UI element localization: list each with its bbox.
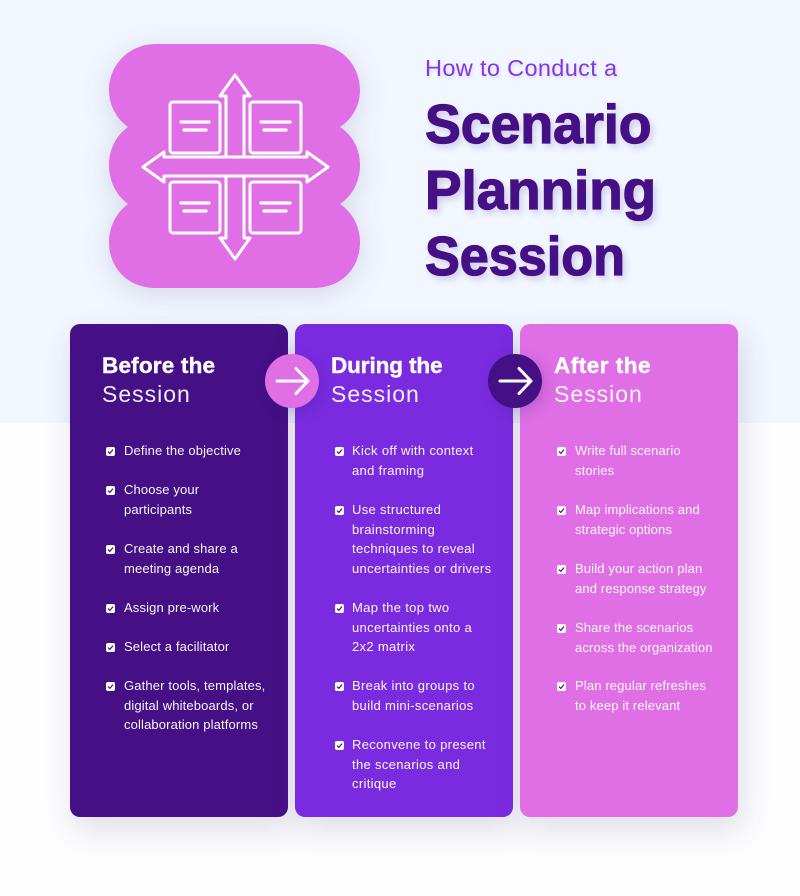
heading: before: Before the [102, 353, 215, 378]
checklist: before [106, 443, 265, 732]
checklist: after: strategic options [575, 522, 672, 536]
checklist: before: digital whiteboards, or [124, 698, 254, 712]
heading: after: Session [554, 381, 643, 407]
checklist: before: participants [124, 502, 192, 516]
checklist: during: the scenarios and [352, 756, 460, 772]
checklist: during: Break into groups to [352, 678, 475, 693]
heading: during: During the [331, 353, 442, 378]
checklist: before: Assign pre-work [124, 600, 219, 615]
checklist: before: Define the objective [124, 443, 241, 458]
checklist: before: meeting agenda [124, 560, 219, 576]
checklist: before: Create and share a [124, 541, 238, 556]
checklist: during: Use structured [352, 502, 441, 517]
title line: Scenario: Scenario [425, 93, 652, 155]
checklist: before: Select a facilitator [124, 639, 229, 654]
checklist: after: Write full scenario [575, 443, 681, 458]
checklist: during: 2x2 matrix [352, 639, 415, 654]
arrow: before to during [265, 354, 319, 408]
checklist: before: collaboration platforms [124, 717, 258, 732]
title line: Planning: Planning [425, 159, 656, 221]
checklist: during: Map the top two [352, 600, 449, 615]
panel: before the session [70, 324, 288, 817]
heading: during: Session [331, 381, 420, 407]
checklist: during: techniques to reveal [352, 541, 475, 556]
heading: during [331, 353, 442, 407]
checklist: during: brainstorming [352, 522, 435, 536]
heading: after [554, 353, 651, 407]
scalloped badge shape [109, 44, 360, 288]
checklist: after: Plan regular refreshes [575, 678, 706, 693]
checklist: during [335, 443, 491, 791]
checklist: after: across the organization [575, 640, 713, 654]
checklist: after: Share the scenarios [575, 620, 693, 635]
panel: during the session [295, 324, 513, 817]
checklist: during: uncertainties onto a [352, 620, 472, 634]
checklist: after: stories [575, 462, 614, 478]
checklist: during: Reconvene to present [352, 737, 486, 752]
checklist: after: to keep it relevant [575, 698, 680, 712]
title line: Session: Session [425, 225, 625, 287]
checklist: after: Build your action plan [575, 561, 702, 576]
checklist: before: Choose your [124, 482, 199, 497]
icon: scenario matrix badge [102, 42, 366, 302]
checklist: during: build mini-scenarios [352, 698, 473, 712]
checklist: during: and framing [352, 462, 424, 478]
checklist: after: and response strategy [575, 580, 707, 596]
checklist: after: Map implications and [575, 502, 700, 517]
heading: after: After the [554, 353, 651, 378]
background: top band [0, 0, 800, 423]
heading: before [102, 353, 215, 407]
panel: after the session [520, 324, 738, 817]
checklist: before: Gather tools, templates, [124, 678, 265, 693]
checklist: after [557, 443, 713, 712]
matrix arrows and note cards [143, 75, 328, 259]
checklist: during: uncertainties or drivers [352, 560, 491, 576]
heading: before: Session [102, 381, 191, 407]
arrow: during to after [488, 354, 542, 408]
subtitle: How to Conduct a [425, 55, 617, 81]
checklist: during: Kick off with context [352, 443, 474, 458]
checklist: during: critique [352, 776, 397, 791]
